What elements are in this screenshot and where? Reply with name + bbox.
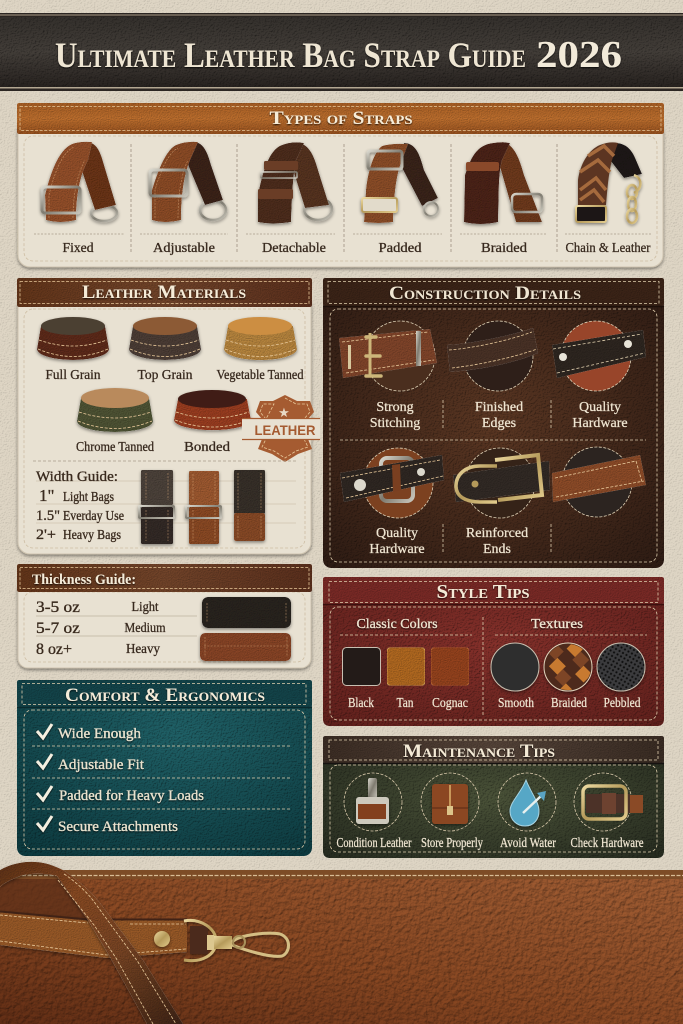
badge: leather: LEATHER — [254, 422, 316, 438]
title banner — [0, 13, 683, 91]
strap: two inch width — [234, 470, 265, 541]
texture: pebbled — [597, 643, 645, 711]
shoulder strap — [0, 862, 183, 1024]
texture: pebbled: Pebbled — [604, 696, 640, 711]
swatch: chrome tanned — [77, 388, 153, 432]
title: Ultimate Leather Bag Strap Guide — [55, 35, 526, 75]
panel: types of straps — [17, 103, 664, 267]
heading: construction details: Construction Details — [389, 283, 581, 304]
heading: leather materials: Leather Materials — [82, 282, 246, 303]
label: chain and leather: Chain & Leather — [566, 241, 651, 256]
item: wide enough: Wide Enough — [58, 726, 142, 742]
heading: comfort and ergonomics — [17, 680, 312, 708]
swatch: thin leather — [202, 597, 291, 628]
heading: thickness guide: Thickness Guide: — [32, 572, 136, 588]
text block: width guide: Everday Use — [63, 508, 124, 523]
panel: leather materials — [17, 278, 320, 554]
item: secure attachments: Secure Attachments — [58, 819, 178, 835]
bag body — [0, 878, 683, 1024]
label: full grain: Full Grain — [46, 368, 100, 383]
text block: width guide: 1" — [39, 486, 54, 505]
heading: maintenance tips — [323, 736, 664, 764]
swatch: thick leather — [200, 633, 291, 661]
row: 3 to 5 oz — [36, 599, 159, 616]
label: quality hardware top: Hardware — [572, 416, 628, 431]
panel: thickness guide — [17, 564, 312, 668]
label: braided: Braided — [481, 241, 527, 256]
text block: width guide: 1.5" — [36, 508, 60, 524]
heading: classic colors: Classic Colors — [356, 617, 438, 632]
heading: textures: Textures — [531, 617, 583, 632]
item: adjustable fit: Adjustable Fit — [58, 757, 145, 773]
heading: types of straps — [17, 103, 664, 134]
label: reinforced ends: Ends — [483, 542, 511, 557]
bag leather and strap — [0, 862, 683, 1024]
label: finished edges: Finished — [475, 400, 523, 415]
row: 8 oz plus — [36, 641, 160, 658]
badge: leather — [242, 395, 320, 462]
heading: construction details — [323, 278, 664, 306]
row: 3 to 5 oz: Light — [132, 600, 159, 615]
label: padded: Padded — [378, 241, 422, 256]
swatch: black — [342, 648, 380, 711]
detail: quality hardware bottom — [340, 448, 444, 518]
panel: maintenance tips — [323, 736, 664, 858]
panel: construction details — [323, 278, 664, 568]
strap: one inch width — [139, 470, 174, 544]
swatch: top grain — [129, 317, 201, 360]
detail: reinforced ends — [453, 448, 550, 518]
detail: strong stitching — [339, 321, 437, 391]
label: adjustable: Adjustable — [153, 241, 215, 256]
label: fixed: Fixed — [62, 241, 94, 256]
icon: store properly — [421, 773, 479, 831]
icon: check hardware — [574, 773, 643, 831]
label: finished edges: Edges — [482, 416, 516, 431]
heading: style tips — [323, 577, 664, 604]
title year: 2026 — [536, 34, 622, 76]
badge: leather: ★ — [278, 405, 290, 420]
row: 5 to 7 oz: 5-7 oz — [36, 620, 80, 637]
heading: comfort and ergonomics: Comfort & Ergonomics — [65, 686, 265, 706]
item: padded for heavy loads: Padded for Heavy Loads — [59, 788, 204, 804]
label: strong stitching: Stitching — [370, 416, 420, 431]
detail: leather end — [552, 447, 646, 517]
strap: adjustable — [150, 142, 226, 222]
detail: quality hardware top — [552, 321, 646, 391]
panel: style tips — [323, 577, 664, 726]
label: detachable: Detachable — [262, 241, 326, 256]
icon: avoid water — [498, 773, 556, 831]
text block: width guide: Width Guide: — [36, 469, 118, 485]
row: 8 oz plus: 8 oz+ — [36, 641, 72, 658]
strap: padded — [362, 143, 438, 223]
label: bonded: Bonded — [184, 440, 230, 455]
heading: leather materials — [17, 278, 312, 307]
horizontal strap — [0, 912, 187, 958]
swatch: tan — [387, 648, 425, 711]
rivet — [154, 931, 170, 947]
row: 5 to 7 oz — [36, 620, 166, 637]
swatch: cognac: Cognac — [432, 696, 468, 711]
panel: comfort and ergonomics — [17, 680, 312, 856]
row: 5 to 7 oz: Medium — [124, 621, 166, 636]
label: reinforced ends: Reinforced — [466, 526, 528, 541]
label: condition leather: Condition Leather — [336, 836, 412, 851]
label: store properly: Store Properly — [421, 836, 483, 851]
text block: width guide: Heavy Bags — [63, 527, 121, 542]
heading: maintenance tips: Maintenance Tips — [403, 741, 555, 762]
heading: types of straps: Types of Straps — [270, 108, 412, 129]
icon: condition leather — [344, 773, 402, 831]
label: avoid water: Avoid Water — [500, 836, 556, 851]
label: quality hardware bottom: Hardware — [369, 542, 425, 557]
label: quality hardware top: Quality — [579, 400, 621, 415]
label: chrome tanned: Chrome Tanned — [76, 440, 154, 455]
label: top grain: Top Grain — [138, 368, 192, 383]
texture: braided: Braided — [551, 696, 587, 711]
texture: smooth — [491, 643, 539, 711]
swatch: vegetable tanned — [224, 317, 297, 360]
strap: detachable — [258, 142, 332, 224]
texture: braided — [542, 642, 594, 708]
swatch: black: Black — [348, 696, 374, 711]
heading: thickness guide — [17, 564, 312, 592]
strap: braided — [464, 142, 542, 224]
swatch: tan: Tan — [396, 696, 414, 711]
clasp hook — [184, 920, 288, 961]
strap: one and a half inch width — [186, 471, 221, 544]
texture: smooth: Smooth — [498, 696, 534, 711]
item: adjustable fit — [37, 754, 145, 773]
swatch: cognac — [431, 648, 469, 711]
label: strong stitching: Strong — [376, 400, 414, 415]
shaded area under strap — [0, 879, 95, 920]
text block: width guide: Light Bags — [63, 489, 114, 504]
text block: width guide — [36, 469, 124, 543]
row: 3 to 5 oz: 3-5 oz — [36, 599, 80, 616]
strap: chain and leather — [576, 142, 642, 223]
heading: style tips: Style Tips — [436, 581, 530, 603]
row: 8 oz plus: Heavy — [126, 642, 160, 657]
strap: fixed — [42, 142, 117, 222]
label: vegetable tanned: Vegetable Tanned — [216, 368, 304, 383]
text block: width guide: 2'+ — [36, 527, 56, 543]
detail: finished edges — [447, 321, 538, 391]
label: check hardware: Check Hardware — [570, 836, 644, 851]
swatch: full grain — [37, 317, 109, 360]
label: quality hardware bottom: Quality — [376, 526, 418, 541]
swatch: bonded — [174, 390, 251, 430]
